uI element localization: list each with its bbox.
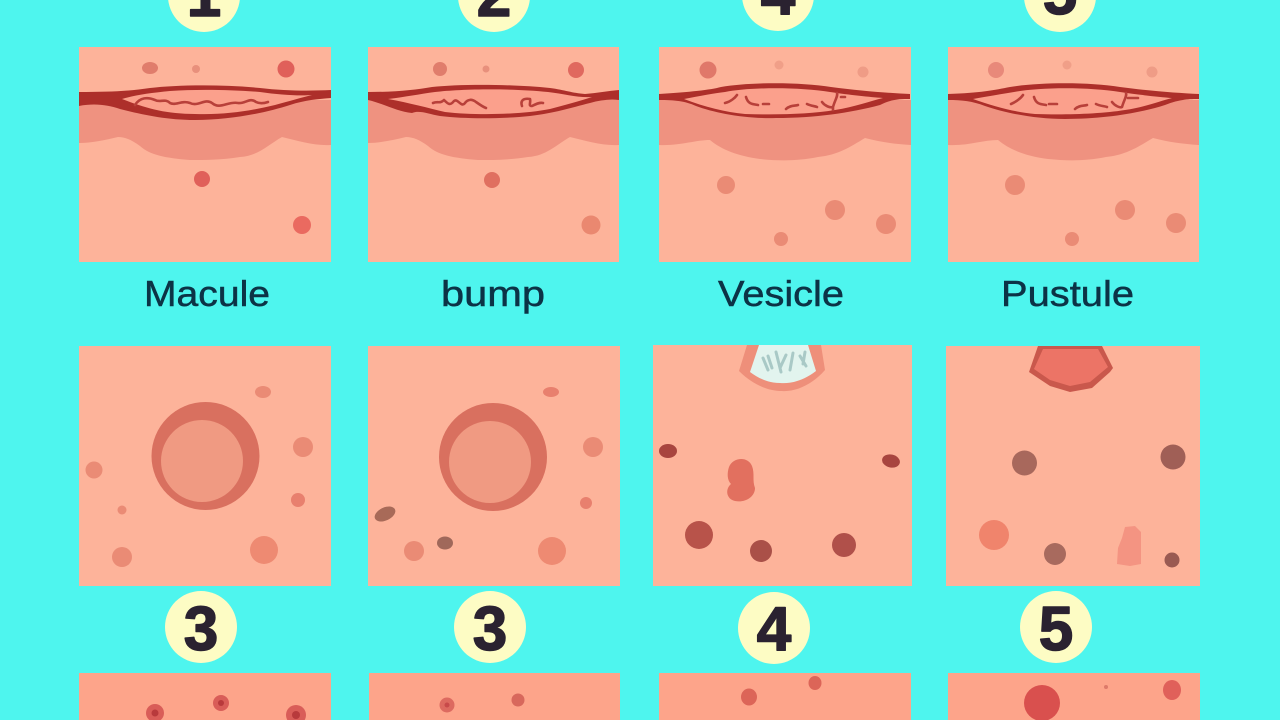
panel: bottom row 1: [79, 673, 331, 720]
badge: number 3 second: 3: [473, 595, 507, 664]
panel: bump surface view: [368, 346, 620, 586]
label: bump: bump: [441, 273, 545, 314]
panel: vesicle cross-section: [659, 47, 911, 262]
panel: bottom row 3: [659, 673, 911, 720]
badge: number 3: [165, 591, 237, 664]
badge: number 4: [738, 592, 810, 664]
panel: vesicle surface view: [653, 345, 912, 586]
panel: macule cross-section: [79, 47, 331, 262]
badge: number 4: 4: [757, 595, 792, 664]
badge: number 1: [168, 0, 240, 32]
badge: number 3 second: [454, 591, 526, 664]
badge: number 5: 5: [1039, 595, 1073, 664]
panel: pustule surface view: [946, 346, 1200, 586]
badge: number 2: [458, 0, 530, 32]
badge: number 4: [742, 0, 814, 31]
panel: bottom row 4: [948, 673, 1200, 720]
label: Pustule: Pustule: [1001, 273, 1134, 314]
badge: number 3: 3: [184, 595, 218, 664]
panel: pustule cross-section: [948, 47, 1199, 262]
panel: bottom row 2: [369, 673, 620, 720]
panel: bump cross-section: [368, 47, 619, 262]
label: Vesicle: Vesicle: [718, 273, 844, 314]
badge: number 5: [1020, 591, 1092, 664]
panel: macule surface view: [79, 346, 331, 586]
badge: number 5: [1024, 0, 1096, 32]
label: Macule: Macule: [144, 273, 270, 314]
